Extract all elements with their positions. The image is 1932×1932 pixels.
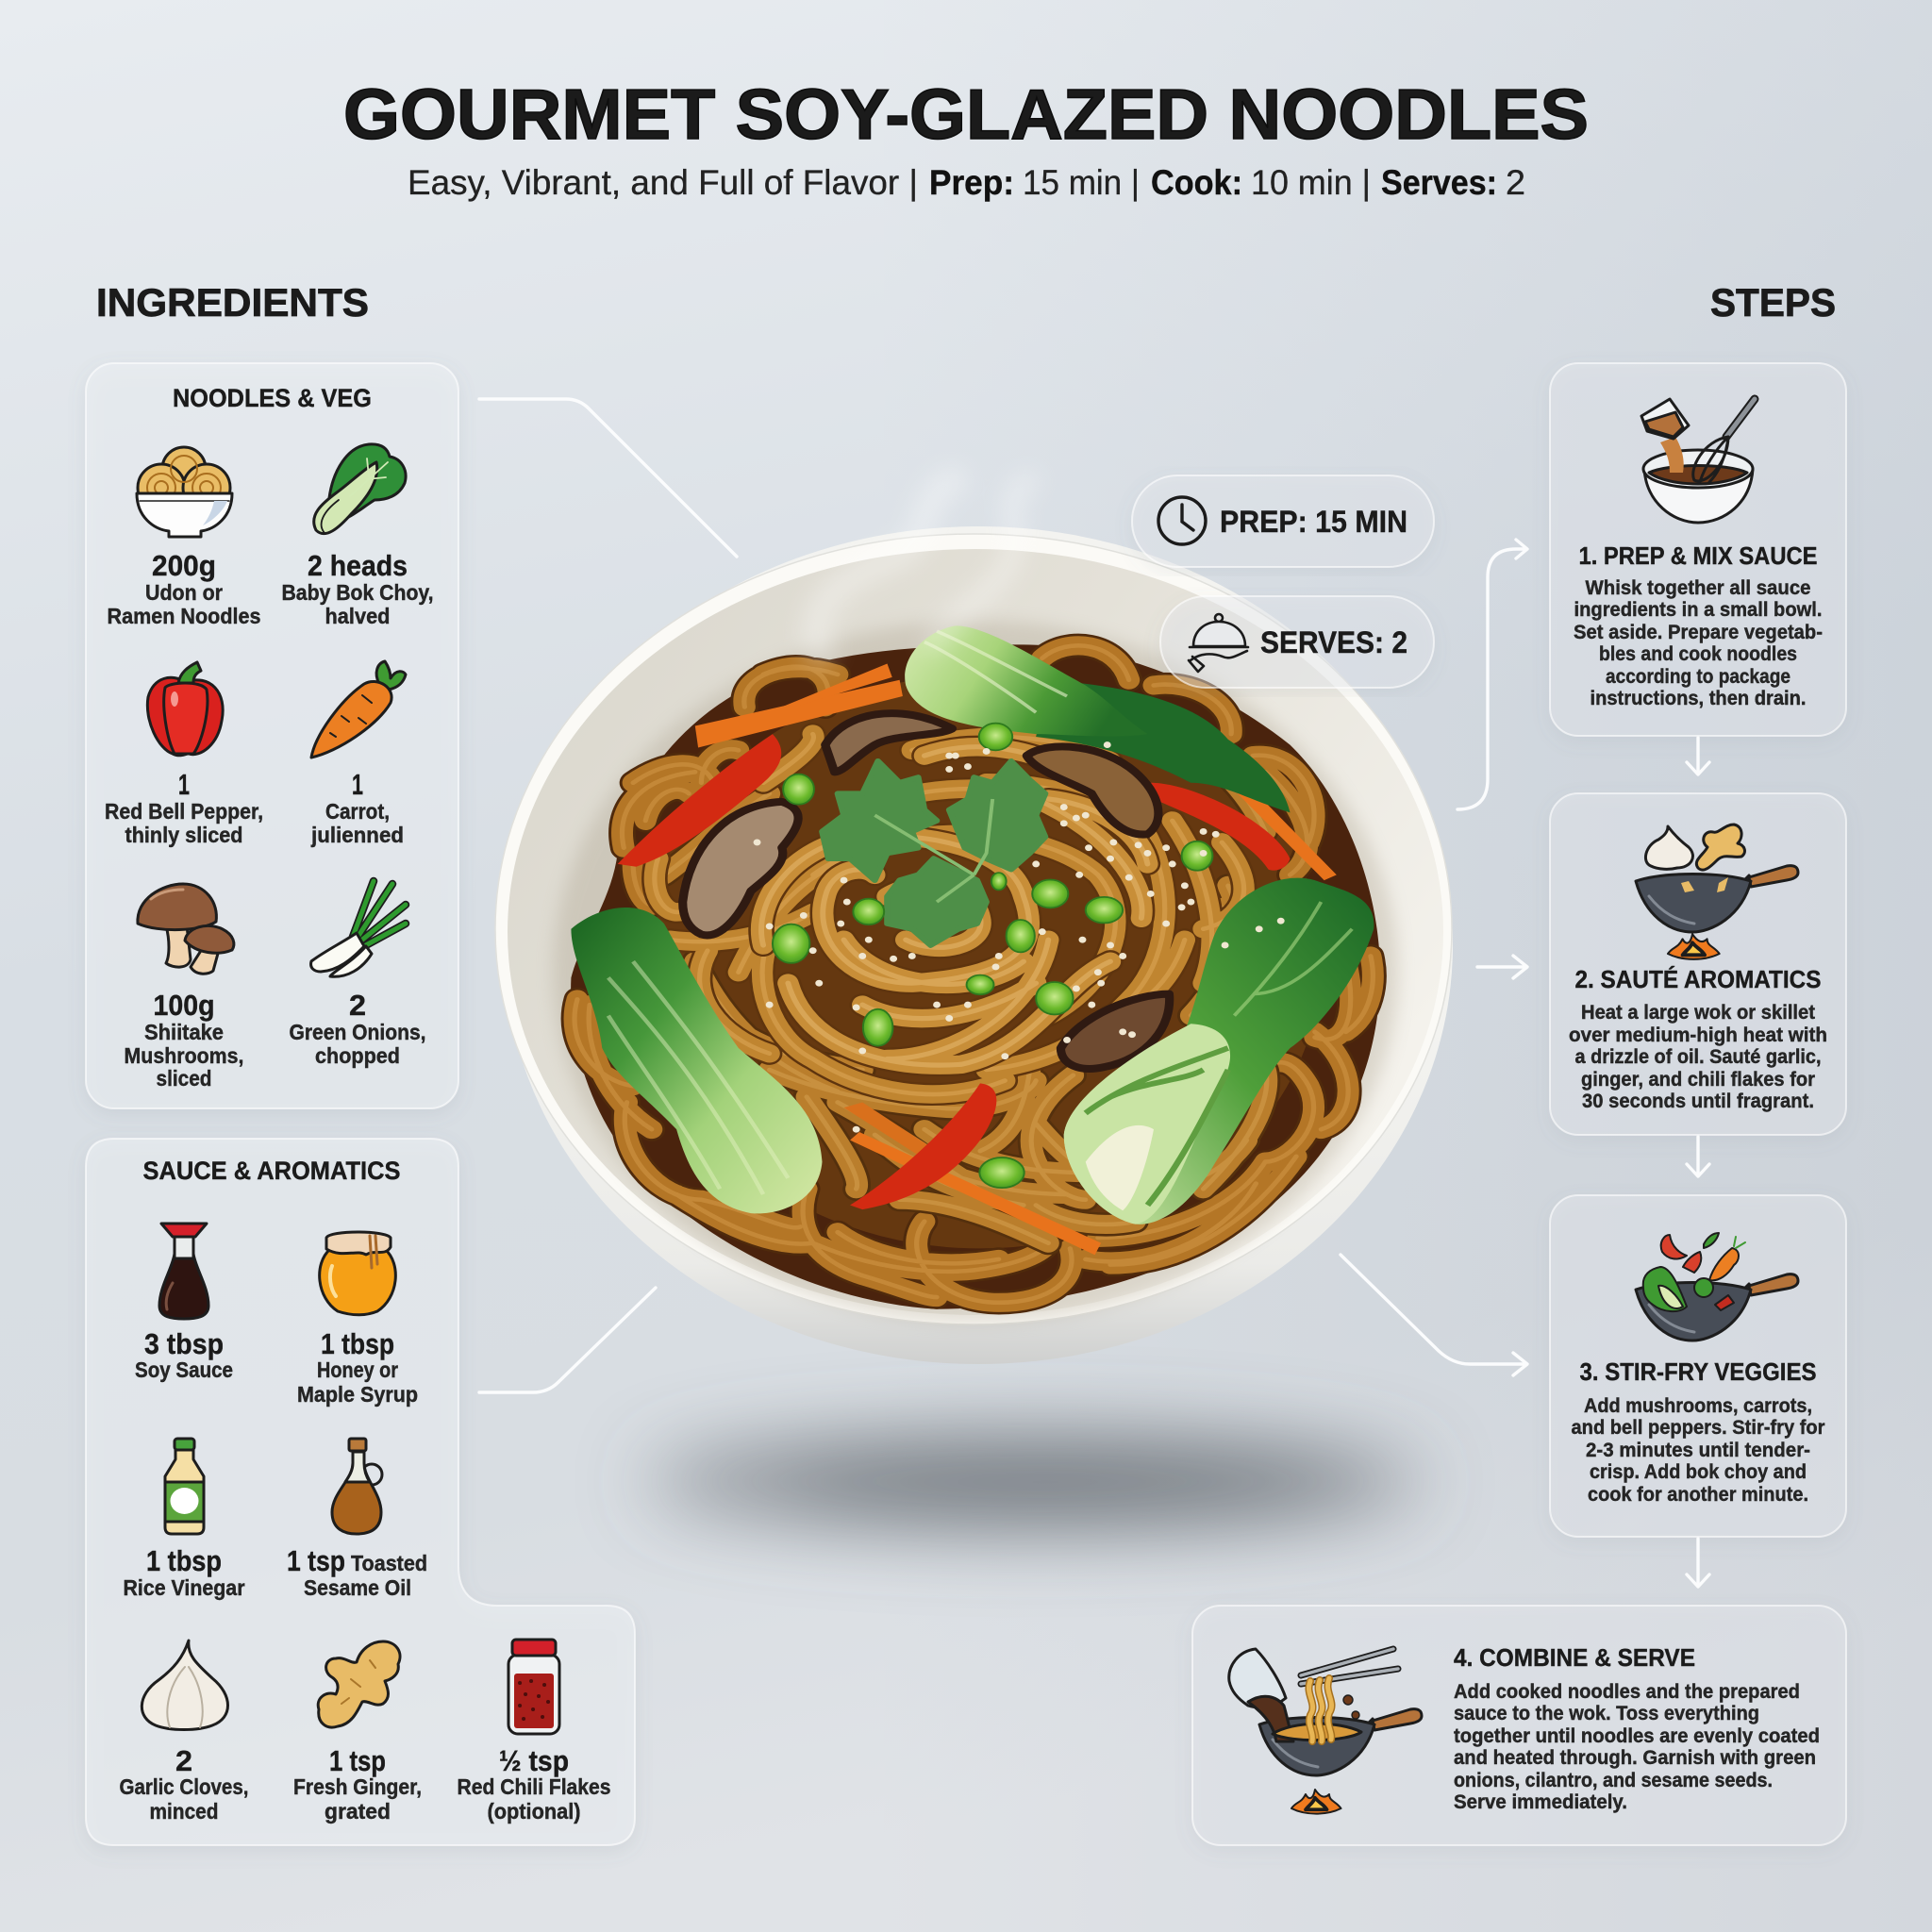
quantity and label: 1	[178, 768, 190, 801]
icon: soy sauce bottle	[159, 1224, 208, 1319]
subtitle: 10 min |	[1251, 163, 1371, 202]
quantity and label	[289, 989, 426, 1068]
quantity and label: Rice Vinegar	[123, 1575, 245, 1600]
step text: Heat a large wok or skillet	[1581, 1001, 1815, 1024]
bok choy: left	[571, 908, 822, 1213]
quantity and label: 1	[352, 768, 363, 801]
icon: wok with tossed vegetables	[1636, 1233, 1798, 1341]
quantity and label: 3 tbsp	[144, 1327, 224, 1360]
arrow: bowl to step 2	[1477, 956, 1527, 978]
step text	[1572, 1394, 1825, 1506]
quantity and label: grated	[325, 1799, 391, 1824]
ingredient: mushrooms	[125, 884, 243, 1091]
subtitle: Prep:	[929, 163, 1014, 202]
quantity and label: Toasted	[351, 1551, 427, 1575]
step text: Set aside. Prepare vegetab-	[1574, 621, 1823, 643]
icon: ginger root	[318, 1641, 400, 1727]
step text: Add mushrooms, carrots,	[1584, 1394, 1812, 1417]
quantity and label: Ramen Noodles	[108, 604, 260, 628]
icon: carrot	[311, 661, 406, 758]
bowl basin	[508, 549, 1443, 1315]
quantity and label: Mushrooms,	[125, 1043, 243, 1068]
icon: green onions	[311, 881, 406, 976]
quantity and label	[293, 1744, 422, 1824]
quantity and label: ½ tsp	[499, 1744, 569, 1777]
quantity and label	[123, 1544, 245, 1600]
quantity and label	[105, 768, 263, 847]
bowl shadow	[648, 1432, 1422, 1530]
title: GOURMET SOY-GLAZED NOODLES	[343, 75, 1589, 154]
icon: bok choy	[314, 444, 406, 534]
icon: wok with garlic and ginger	[1636, 824, 1798, 959]
noodles: swirl top layer	[761, 747, 1147, 1065]
noodles: middle bottom layer	[664, 734, 1267, 1243]
ingredient: honey	[297, 1232, 418, 1407]
icon: cloche	[1189, 614, 1248, 672]
step heading: 2. SAUTÉ AROMATICS	[1575, 965, 1821, 993]
quantity and label	[287, 1544, 427, 1600]
ingredient: noodles	[108, 447, 260, 628]
icon: garlic	[142, 1641, 228, 1730]
ingredient: rice vinegar	[123, 1439, 245, 1600]
panel heading: SAUCE & AROMATICS	[143, 1157, 400, 1185]
heading: ingredients: INGREDIENTS	[96, 280, 369, 325]
ingredient: garlic	[119, 1641, 249, 1824]
step text: crisp. Add bok choy and	[1590, 1460, 1807, 1483]
noodles: swirl outer layer	[655, 734, 1244, 1094]
step text: instructions, then drain.	[1591, 687, 1806, 709]
connector: sauce panel to bowl	[479, 1288, 656, 1392]
step text: cook for another minute.	[1588, 1483, 1808, 1506]
panel: step 3	[1550, 1195, 1846, 1537]
icon: oil cruet	[332, 1439, 382, 1534]
icon: mushrooms	[138, 884, 234, 974]
quantity and label: 200g	[152, 549, 216, 582]
quantity and label	[310, 768, 404, 847]
arrow: step 3 to step 4	[1687, 1539, 1709, 1587]
noodles: back layer	[575, 645, 1373, 1303]
subtitle: 2	[1506, 163, 1525, 202]
panel: step 1	[1550, 363, 1846, 736]
step text: according to package	[1606, 665, 1790, 688]
bok choy: right	[1064, 878, 1374, 1224]
step text: over medium-high heat with	[1569, 1024, 1827, 1046]
step text: ingredients in a small bowl.	[1574, 598, 1823, 621]
icon: vinegar bottle	[165, 1439, 204, 1534]
quantity and label	[281, 549, 434, 628]
step text: Whisk together all sauce	[1585, 576, 1811, 599]
quantity and label: Udon or	[145, 580, 223, 605]
step text: bles and cook noodles	[1599, 642, 1797, 665]
icon: red bell pepper	[147, 662, 223, 756]
quantity and label: Shiitake	[144, 1020, 224, 1044]
pill: serves	[1160, 596, 1434, 688]
icon: honey jar	[320, 1232, 395, 1315]
panel: step 4	[1192, 1606, 1846, 1845]
quantity and label	[108, 549, 260, 628]
quantity and label: 2 heads	[308, 549, 408, 582]
subtitle: Easy, Vibrant, and Full of Flavor |	[408, 163, 918, 202]
quantity and label: Baby Bok Choy,	[281, 580, 434, 605]
quantity and label: 2	[349, 989, 366, 1022]
quantity and label: (optional)	[487, 1799, 581, 1824]
bowl outer	[504, 526, 1453, 1364]
quantity and label: Sesame Oil	[304, 1575, 411, 1600]
arrow: step 1 to step 2	[1687, 738, 1709, 774]
connector: noodles panel to bowl	[479, 399, 737, 557]
bowl rim	[495, 534, 1452, 1324]
quantity and label: Maple Syrup	[297, 1382, 418, 1407]
ingredient: bok choy	[281, 444, 434, 628]
ingredient: ginger	[293, 1641, 422, 1824]
basin soft shade	[553, 621, 1398, 1323]
red pepper strips	[618, 734, 1291, 1209]
step heading: 3. STIR-FRY VEGGIES	[1579, 1357, 1817, 1386]
quantity and label	[457, 1744, 611, 1824]
quantity and label: thinly sliced	[125, 823, 243, 847]
step text: Add cooked noodles and the prepared	[1454, 1680, 1800, 1703]
arrow: bowl to step 3	[1341, 1255, 1527, 1375]
icon: clock	[1158, 497, 1206, 544]
step text: Serve immediately.	[1454, 1790, 1627, 1813]
ingredient: carrot	[310, 661, 406, 847]
step heading: 4. COMBINE & SERVE	[1454, 1643, 1695, 1672]
quantity and label	[119, 1744, 249, 1824]
sesame seeds	[758, 745, 1281, 1129]
quantity and label: 2	[175, 1744, 192, 1777]
quantity and label: minced	[149, 1799, 219, 1824]
quantity and label: chopped	[315, 1043, 400, 1068]
quantity and label: 1 tbsp	[321, 1327, 394, 1360]
green onions	[773, 724, 1212, 1188]
quantity and label: Fresh Ginger,	[293, 1774, 422, 1799]
step text: and bell peppers. Stir-fry for	[1572, 1416, 1825, 1439]
mushrooms	[683, 713, 1170, 1069]
icon: noodle bowl	[137, 447, 232, 537]
ingredient: sesame oil	[287, 1439, 427, 1600]
pill: serves: SERVES: 2	[1260, 625, 1407, 659]
pill: prep time: PREP: 15 MIN	[1220, 505, 1407, 539]
subtitle: 15 min |	[1023, 163, 1140, 202]
step text: a drizzle of oil. Sauté garlic,	[1575, 1045, 1821, 1068]
step text	[1574, 576, 1823, 709]
step text: onions, cilantro, and sesame seeds.	[1454, 1769, 1773, 1791]
quantity and label: 100g	[153, 989, 215, 1022]
subtitle: Cook:	[1151, 163, 1242, 202]
quantity and label: Green Onions,	[289, 1020, 426, 1044]
quantity and label: julienned	[310, 823, 404, 847]
subtitle: Serves:	[1381, 163, 1497, 202]
panel: noodles and veg	[86, 363, 458, 1108]
quantity and label: Soy Sauce	[135, 1357, 233, 1382]
arrow: step 2 to step 3	[1687, 1137, 1709, 1176]
steam	[816, 481, 1028, 651]
quantity and label	[125, 989, 243, 1091]
step heading: 1. PREP & MIX SAUCE	[1579, 541, 1817, 570]
food	[571, 625, 1380, 1309]
quantity and label: Red Chili Flakes	[457, 1774, 611, 1799]
icon: mixing bowl with whisk	[1641, 399, 1755, 523]
pill: prep time	[1132, 475, 1434, 567]
panel: step 2	[1550, 793, 1846, 1135]
icon: pouring sauce into wok with noodles	[1229, 1649, 1422, 1814]
bok choy: top	[905, 625, 1291, 812]
quantity and label: sliced	[157, 1066, 211, 1091]
icon: chili flakes jar	[508, 1640, 559, 1734]
ingredient: chili flakes	[457, 1640, 611, 1824]
quantity and label: 1 tbsp	[146, 1544, 222, 1577]
carrot strips	[695, 664, 1337, 1255]
subtitle	[408, 163, 1525, 202]
ingredient: soy sauce	[135, 1224, 233, 1382]
arrow: bowl to step 1	[1457, 540, 1527, 809]
broth	[571, 644, 1380, 1309]
panel: sauce and aromatics	[86, 1139, 635, 1845]
quantity and label: 1 tsp	[287, 1544, 345, 1577]
quantity and label: Honey or	[317, 1357, 398, 1382]
ingredient: green onions	[289, 881, 426, 1068]
step text: together until noodles are evenly coated	[1454, 1724, 1820, 1747]
quantity and label	[135, 1327, 233, 1382]
panel heading: NOODLES & VEG	[173, 384, 372, 412]
step text	[1454, 1680, 1820, 1813]
quantity and label: 1 tsp	[329, 1744, 386, 1777]
quantity and label: Carrot,	[325, 799, 390, 824]
ingredient: red pepper	[105, 662, 263, 847]
step text: sauce to the wok. Toss everything	[1454, 1702, 1759, 1724]
step text: 30 seconds until fragrant.	[1582, 1090, 1814, 1112]
quantity and label: Garlic Cloves,	[119, 1774, 249, 1799]
heading: steps: STEPS	[1710, 280, 1836, 325]
step text	[1569, 1001, 1827, 1112]
step text: and heated through. Garnish with green	[1454, 1746, 1816, 1769]
quantity and label: halved	[325, 604, 391, 628]
cilantro	[822, 761, 1045, 945]
step text: 2-3 minutes until tender-	[1586, 1439, 1810, 1461]
quantity and label	[297, 1327, 418, 1407]
noodle underlay	[640, 675, 1321, 1248]
noodle bowl hero image	[495, 481, 1453, 1364]
quantity and label: Red Bell Pepper,	[105, 799, 263, 824]
step text: ginger, and chili flakes for	[1581, 1068, 1816, 1091]
